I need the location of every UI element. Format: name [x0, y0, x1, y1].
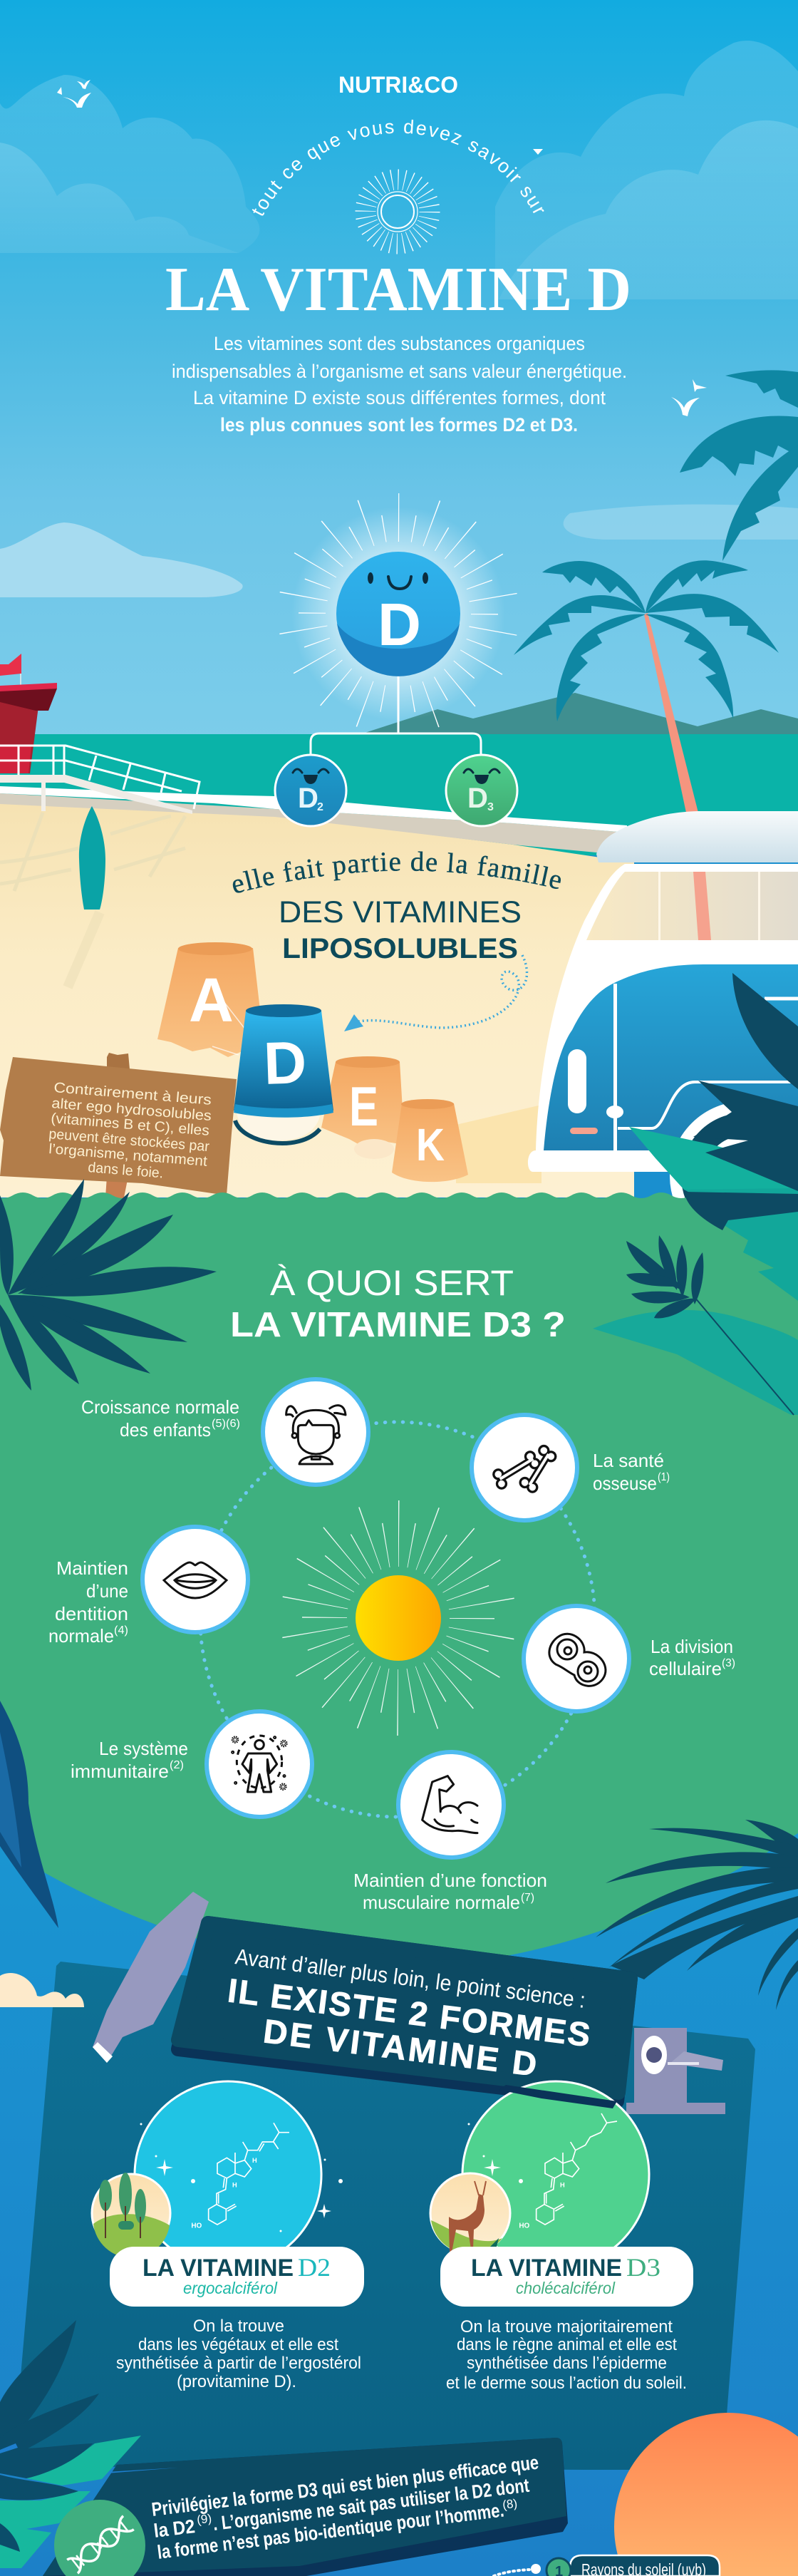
- label: cell division: La division: [651, 1636, 733, 1657]
- label: immune system: Le système: [99, 1738, 188, 1759]
- lifeguard tower: [0, 654, 57, 773]
- heading banner: Avant d’aller plus loin, le point science :: [234, 1944, 587, 2013]
- note text: . L’organisme ne sait pas utiliser la D2 dont: [212, 2475, 530, 2535]
- label: child growth: Croissance normale: [81, 1396, 239, 1418]
- label: immune system: [71, 1738, 188, 1782]
- blue bucket D: D: [262, 1029, 308, 1097]
- mountains: [356, 693, 798, 736]
- label: bones: (1): [658, 1471, 670, 1483]
- liposoluble heading: [279, 895, 522, 964]
- vitamin D2 character: 2: [317, 801, 323, 813]
- D3 circle: [462, 2081, 649, 2268]
- molecule: ergocalciferol: HO: [191, 2222, 202, 2230]
- text: D2 source: On la trouve: [193, 2317, 284, 2336]
- heading banner: DE VITAMINE D: [261, 2011, 539, 2083]
- heading banner: [178, 1923, 631, 2101]
- label: cell division: cellulaire: [649, 1658, 722, 1679]
- label: bones: La santé: [593, 1450, 664, 1471]
- wooden sign: alter ego hydrosolubles: [51, 1096, 212, 1124]
- name card D2: D2: [298, 2253, 331, 2282]
- banner foreground corner: [499, 2085, 617, 2108]
- name card D3: [440, 2247, 693, 2307]
- tower shadows on sand: [0, 813, 185, 987]
- wooden sign: l’organisme, notamment: [48, 1141, 208, 1170]
- text: D3 source: synthétisée dans l’épiderme: [467, 2354, 667, 2373]
- icon: muscle: [398, 1752, 504, 1858]
- label: child growth: [81, 1396, 240, 1441]
- cloud: mid right: [564, 505, 798, 540]
- logo: NUTRI&CO: [338, 72, 458, 98]
- green section with wave edge: [0, 1192, 798, 1967]
- heading banner: IL EXISTE 2 FORMES: [226, 1971, 592, 2054]
- section heading: [230, 1263, 566, 1344]
- wooden sign: (vitamines B et C), elles: [51, 1111, 210, 1139]
- sand bucket A: [157, 942, 265, 1057]
- note text: la forme n’est pas bio-identique pour l’homme.: [156, 2499, 505, 2563]
- note text: (9): [196, 2512, 212, 2527]
- molecule: cholecalciferol: HO: [519, 2222, 530, 2230]
- sparkles D2: [140, 2123, 343, 2232]
- sky background: [0, 0, 798, 741]
- orange setting sun: [614, 2413, 798, 2576]
- right large teal and dark leaves: [629, 973, 798, 1301]
- name card D3: LA VITAMINE: [471, 2255, 622, 2282]
- wooden sign: [0, 1053, 237, 1230]
- vitamin D3 character: D: [467, 783, 488, 814]
- right small dark plant and teal leaf: [593, 1235, 798, 1415]
- step 1 dotted line: [494, 2564, 541, 2576]
- label: bones: osseuse: [593, 1473, 657, 1494]
- wooden sign: Contrairement à leurs: [53, 1080, 212, 1108]
- label: teeth: dentition: [55, 1603, 128, 1624]
- name card D3: D3: [626, 2253, 660, 2282]
- note text: [150, 2452, 540, 2563]
- sand bucket A: A: [189, 966, 234, 1035]
- birds: right: [533, 149, 707, 416]
- intro text: indispensables à l’organisme et sans valeur énergétique.: [172, 361, 627, 382]
- blue lower background: [0, 1782, 798, 2576]
- vitamin D2 character: [275, 755, 346, 826]
- D2 circle: [135, 2081, 343, 2268]
- note text: la D2: [152, 2515, 196, 2542]
- bottom left dark leaves: [0, 2320, 99, 2463]
- curved family text: elle fait partie de la famille: [232, 851, 561, 893]
- label: immune system: (2): [170, 1759, 184, 1771]
- intro text: les plus connues sont les formes D2 et D3.: [220, 414, 578, 436]
- icon: bones: [472, 1415, 577, 1520]
- text: D2 source: dans les végétaux et elle est: [138, 2335, 338, 2354]
- section heading: LA VITAMINE D3 ?: [230, 1306, 566, 1344]
- icon: immune system: [207, 1711, 312, 1817]
- intro text: Les vitamines sont des substances organiques: [214, 333, 585, 354]
- section heading: À QUOI SERT: [270, 1263, 514, 1303]
- molecule: cholecalciferol: [519, 2113, 617, 2230]
- vitamin D3 character: [446, 755, 517, 826]
- label: bones: [593, 1450, 670, 1494]
- sand bucket K: [392, 1099, 468, 1182]
- icon: cell division: [524, 1606, 629, 1711]
- name card D2: [110, 2247, 364, 2307]
- railing and deck: [0, 746, 200, 814]
- text: D3 source: dans le règne animal et elle est: [457, 2335, 677, 2354]
- vitamin D connector: [311, 674, 481, 756]
- label: teeth: d’une: [86, 1580, 128, 1602]
- cloud: lower left: [0, 1973, 84, 2007]
- label: teeth: (4): [114, 1624, 128, 1637]
- molecule: ergocalciferol: [191, 2123, 289, 2230]
- label: teeth: normale: [48, 1625, 114, 1647]
- wooden sign: peuvent être stockées par: [48, 1126, 210, 1155]
- right dark palm: [596, 1820, 798, 2010]
- central sun with rays: [313, 1532, 484, 1704]
- label: teeth: [48, 1557, 128, 1647]
- microscope: [93, 1892, 725, 2114]
- label: child growth: des enfants: [120, 1419, 211, 1441]
- shoreline band: [0, 786, 627, 855]
- text: D2 source: synthétisée à partir de l’ergostérol: [116, 2354, 361, 2373]
- label: cell division: (3): [722, 1657, 735, 1669]
- label: teeth: Maintien: [56, 1557, 128, 1579]
- label: muscle: Maintien d’une fonction: [353, 1870, 547, 1891]
- wooden sign: dans le foie.: [88, 1160, 164, 1181]
- blue bucket D: [234, 1004, 333, 1143]
- note text: (8): [502, 2497, 518, 2512]
- birds: top left: [57, 80, 91, 108]
- label: muscle: (7): [521, 1892, 534, 1904]
- name card D2: ergocalciférol: [183, 2279, 278, 2297]
- left dark blue palm: [0, 1701, 58, 1928]
- sparkles D3: [467, 2123, 523, 2183]
- text: D3 source: [446, 2317, 687, 2393]
- name card D2: LA VITAMINE: [142, 2255, 294, 2282]
- vitamin D2 character: D: [298, 783, 318, 814]
- liposoluble heading: LIPOSOLUBLES: [282, 933, 518, 964]
- name card D3: cholécalciférol: [516, 2279, 616, 2297]
- label: muscle: [353, 1870, 547, 1913]
- cloud: mid left: [0, 522, 243, 597]
- molecule: cholecalciferol: H: [560, 2182, 565, 2189]
- surfboard: [79, 806, 105, 910]
- icon: trees scene: [92, 2173, 170, 2258]
- van: [456, 811, 798, 1245]
- glow and rays: [291, 507, 505, 721]
- text: D2 source: (provitamine D).: [177, 2372, 296, 2391]
- note text: Privilégiez la forme D3 qui est bien plus efficace que: [150, 2452, 540, 2520]
- dotted orbit: [200, 1422, 595, 1817]
- intro text: [172, 333, 627, 436]
- icon: DNA: [54, 2500, 145, 2576]
- vitamin D3 character: 3: [487, 801, 494, 813]
- note banner: [43, 2438, 568, 2576]
- icon: lips: [142, 1527, 248, 1632]
- curved subtitle: tout ce que vous devez savoir sur: [252, 120, 544, 216]
- sand bucket K: K: [416, 1119, 445, 1170]
- sand bucket E: [321, 1056, 405, 1159]
- label: muscle: musculaire normale: [363, 1892, 520, 1913]
- beach sand: [0, 802, 634, 1197]
- science panel: [13, 1962, 755, 2470]
- molecule: ergocalciferol: H: [232, 2182, 237, 2189]
- upper right palm fronds: [680, 370, 798, 561]
- label: immune system: immunitaire: [71, 1761, 169, 1782]
- vitamin D character: D: [378, 591, 421, 658]
- sand bucket E: E: [349, 1075, 378, 1138]
- left palm over green: [0, 1179, 217, 1391]
- clouds: top left: [0, 75, 259, 253]
- palm tree: [514, 560, 779, 813]
- label: cell division: [649, 1636, 735, 1679]
- dotted arrow to D bucket: [344, 955, 527, 1031]
- main title: LA VITAMINE D: [165, 255, 631, 324]
- bottom left teal leaves: [0, 2436, 141, 2568]
- icon: deer scene: [430, 2173, 510, 2254]
- step 1 pill: [546, 2555, 720, 2576]
- text: D2 source: [116, 2317, 361, 2391]
- vitamin D character: [336, 552, 460, 676]
- sea: [0, 734, 798, 855]
- label: child growth: (5)(6): [212, 1418, 240, 1430]
- text: D3 source: et le derme sous l’action du soleil.: [446, 2374, 687, 2393]
- intro text: La vitamine D existe sous différentes formes, dont: [193, 387, 606, 408]
- text: D3 source: On la trouve majoritairement: [460, 2317, 673, 2337]
- icon: small sun: [366, 180, 430, 244]
- clouds: top right: [495, 41, 798, 299]
- liposoluble heading: DES VITAMINES: [279, 895, 522, 929]
- molecule: ergocalciferol: H: [252, 2157, 257, 2164]
- icon: child growth: [263, 1379, 368, 1485]
